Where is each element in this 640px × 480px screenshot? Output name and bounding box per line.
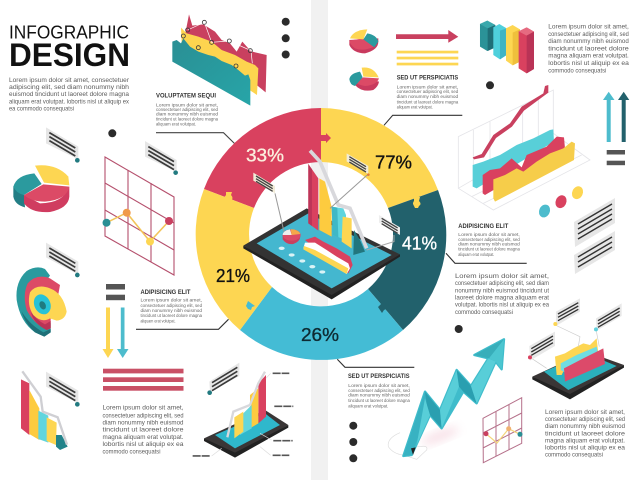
intro text block: ea commodo consequatsi (9, 106, 74, 112)
text: voluptatem sequi: aliquam erat volutpat. (156, 122, 196, 126)
text: adipisicing elit left: tincidunt ut laoreet dolore magna (140, 313, 203, 318)
callout: pie chart (46, 127, 80, 163)
text: sed ut perspiciatis bottom: tincidunt ut laoreet dolore magna (348, 398, 410, 403)
isometric area chart top (172, 14, 267, 106)
text block middle right: Lorem ipsum dolor sit amet, (455, 273, 549, 280)
text block bottom left: consectetuer adipiscing elit, sed (102, 412, 184, 419)
percent labels: 21% (216, 265, 250, 286)
text block bottom left: lobortis nisl ut aliquip ex ea (102, 441, 184, 448)
text block bottom left: commodo consequatsi (102, 448, 160, 456)
text block bottom right: magna aliquam erat volutpat. (545, 437, 625, 444)
dot above grid (108, 129, 116, 137)
leader line: sed ut perspiciatis top (384, 115, 462, 125)
percent labels: 77% (375, 152, 412, 172)
text: sed ut perspiciatis top (397, 84, 459, 110)
heading: adipisicing elit right: ADIPISICING ELIT (458, 223, 508, 230)
text: adipisicing elit left: diam nonummy nibh euismod (140, 308, 203, 313)
text: voluptatem sequi: tincidunt ut laoreet dolore magna (156, 116, 219, 122)
text block top right: lobortis nisl ut aliquip ex ea (548, 60, 629, 67)
leader line: sed ut perspiciatis bottom (337, 359, 414, 367)
arrow: cyan up (603, 92, 614, 142)
text: sed ut perspiciatis bottom: aliquam erat volutpat. (348, 404, 388, 408)
leader line: adipisicing elit (136, 319, 228, 329)
arrow: dark teal up (618, 92, 629, 142)
percent labels: 26% (301, 324, 339, 345)
callout: note 2 (574, 231, 615, 274)
donut callouts (253, 153, 400, 250)
heading: sed ut perspiciatis top: SED UT PERSPICIATIS (397, 74, 458, 82)
text block bottom left: magna aliquam erat volutpat. (102, 434, 184, 441)
title: DESIGN (9, 37, 130, 73)
text block top right: commodo consequatsi (548, 67, 606, 74)
text block bottom left: tincidunt ut laoreet dolore (102, 427, 184, 434)
bar chart labels (193, 373, 293, 456)
text: adipisicing elit right: diam nonummy nibh euismod (458, 242, 520, 246)
text block middle right: volutpat. lobortis nisl ut aliquip ex ea (455, 302, 549, 309)
text: sed ut perspiciatis top: aliquam erat volutpat. (397, 104, 433, 110)
icon: colored ovals (537, 184, 585, 219)
text block bottom right: Lorem ipsum dolor sit amet, (545, 409, 625, 416)
percent labels (216, 144, 437, 345)
text block bottom right: lobortis nisl ut aliquip ex ea (545, 444, 625, 452)
icon: 3D bars top right (480, 21, 534, 73)
title (9, 22, 130, 73)
text: adipisicing elit right (458, 232, 520, 257)
heading: sed ut perspiciatis bottom: SED UT PERSPICIATIS (348, 373, 410, 380)
arrow: big rising zigzag (388, 339, 504, 459)
arrow: red right (396, 30, 458, 43)
text block bottom right: consectetuer adipiscing elit, sed (545, 416, 625, 423)
icon: small pie 2 (349, 67, 379, 91)
tablet area chart (303, 237, 353, 274)
text block middle right: consectetuer adipiscing elit, sed diam (455, 280, 549, 287)
text: voluptatem sequi: Lorem ipsum dolor sit amet, (156, 102, 218, 108)
text: adipisicing elit left: aliquam erat volutpat. (140, 318, 176, 324)
text: sed ut perspiciatis top: consectetuer adipiscing elit, sed (397, 89, 459, 94)
text: sed ut perspiciatis bottom: diam nonummy nibh euismod (348, 392, 410, 398)
icon: yellow bars (397, 51, 458, 65)
segment: 26% blue (240, 287, 403, 360)
callout: note 1 (574, 198, 615, 247)
text block top right: consectetuer adipiscing elit, sed (548, 31, 629, 38)
text block bottom right (545, 409, 625, 459)
callout: bar chart (46, 372, 80, 407)
text block middle right (455, 273, 549, 316)
icon: dashes (106, 284, 125, 300)
text: adipisicing elit left: consectetuer adipiscing elit, sed (140, 303, 203, 308)
text: voluptatem sequi: consectetuer adipiscing elit, sed (156, 107, 219, 112)
title: INFOGRAPHIC (9, 22, 129, 42)
intro text block: Lorem ipsum dolor sit amet, consectetuer (9, 77, 130, 84)
segment: 41% dark teal (368, 190, 446, 330)
icon: red bars bottom (103, 369, 184, 391)
icon: small grid chart (483, 398, 522, 463)
text: sed ut perspiciatis bottom: Lorem ipsum dolor sit amet, (348, 383, 410, 388)
dot middle (455, 325, 463, 333)
central tablet with charts (243, 151, 400, 299)
dots bottom (349, 422, 357, 462)
dots top left (282, 18, 290, 58)
text block middle right: commodo consequatsi (455, 309, 513, 316)
tablet body (243, 208, 400, 299)
icon: isometric grid chart (102, 157, 174, 275)
icon: tablet with bars bottom (204, 363, 288, 458)
puzzle tabs (224, 192, 420, 313)
icon: small pie 1 (349, 29, 378, 53)
segment: 33% red (204, 108, 321, 208)
text block top right: Lorem ipsum dolor sit amet, (548, 24, 629, 31)
percent labels: 33% (246, 144, 284, 166)
text block top right: tincidunt ut laoreet dolore (548, 45, 629, 52)
icon: dashes right (607, 150, 625, 165)
text block bottom left: diam nonummy nibh euismod (102, 420, 184, 427)
dot right (486, 81, 494, 89)
leader line: adipisicing elit right (446, 253, 527, 263)
text: adipisicing elit left: Lorem ipsum dolor sit amet, (140, 298, 202, 302)
text: adipisicing elit right: tincidunt ut laoreet dolore magna (458, 246, 520, 252)
text block middle right: nonummy nibh euismod tincidunt ut (455, 287, 549, 294)
icon: isometric bar chart bottom left (21, 371, 68, 450)
intro text block: euismod tincidunt ut laoreet dolore magna (9, 91, 129, 98)
text block bottom right: commodo consequatsi (545, 452, 603, 459)
text: sed ut perspiciatis bottom: consectetuer adipiscing elit, sed (348, 388, 410, 393)
callout: arc chart (46, 243, 80, 277)
text block bottom right: tincidunt ut laoreet dolore (545, 430, 625, 437)
text: voluptatem sequi (156, 102, 219, 126)
text: voluptatem sequi: diam nonummy nibh euismod (156, 112, 219, 116)
leader line: voluptatem sequi (156, 133, 235, 144)
arrow: teal down (117, 308, 128, 358)
text block top right: diam nonummy nibh euismod (548, 38, 629, 45)
text: adipisicing elit left (140, 298, 203, 324)
text: adipisicing elit right: consectetuer adipiscing elit, sed (458, 237, 520, 242)
text: sed ut perspiciatis bottom (348, 383, 410, 408)
text block bottom left: Lorem ipsum dolor sit amet, (102, 405, 184, 412)
segment: 21% yellow (196, 189, 272, 330)
text block bottom right: diam nonummy nibh euismod (545, 423, 625, 430)
icon: tablet with area chart right (528, 298, 624, 399)
text: sed ut perspiciatis top: Lorem ipsum dolor sit amet, (397, 84, 458, 90)
tablet bars and small pie (283, 151, 367, 255)
intro text block (9, 77, 130, 112)
text block middle right: laoreet dolore magna aliquam erat (455, 294, 549, 301)
text block top right (548, 24, 629, 74)
donut chart (196, 108, 446, 360)
intro text block: aliquam erat volutpat. lobortis nisl ut aliquip ex (9, 98, 130, 105)
percent labels: 41% (402, 232, 437, 254)
arrow: yellow down (102, 308, 114, 358)
heading: voluptatem sequi: VOLUPTATEM SEQUI (156, 92, 216, 100)
text: sed ut perspiciatis top: tincidunt ut laoreet dolore magna (397, 100, 459, 104)
heading: adipisicing elit left: ADIPISICING ELIT (140, 289, 191, 296)
text: sed ut perspiciatis top: diam nonummy nibh euismod (397, 94, 459, 99)
chart: isometric line and area chart (458, 85, 590, 210)
intro text block: adipiscing elit, sed diam nonummy nibh (9, 84, 129, 91)
text block bottom left (102, 405, 184, 456)
icon: 3D pie chart left (13, 165, 69, 212)
text block top right: magna aliquam erat volutpat. (548, 53, 629, 60)
text: adipisicing elit right: aliquam erat volutpat. (458, 252, 494, 257)
icon: concentric arc chart (16, 267, 67, 337)
segment: 77% yellow (320, 108, 438, 208)
callout: grid chart (145, 141, 178, 175)
text: adipisicing elit right: Lorem ipsum dolor sit amet, (458, 232, 520, 237)
